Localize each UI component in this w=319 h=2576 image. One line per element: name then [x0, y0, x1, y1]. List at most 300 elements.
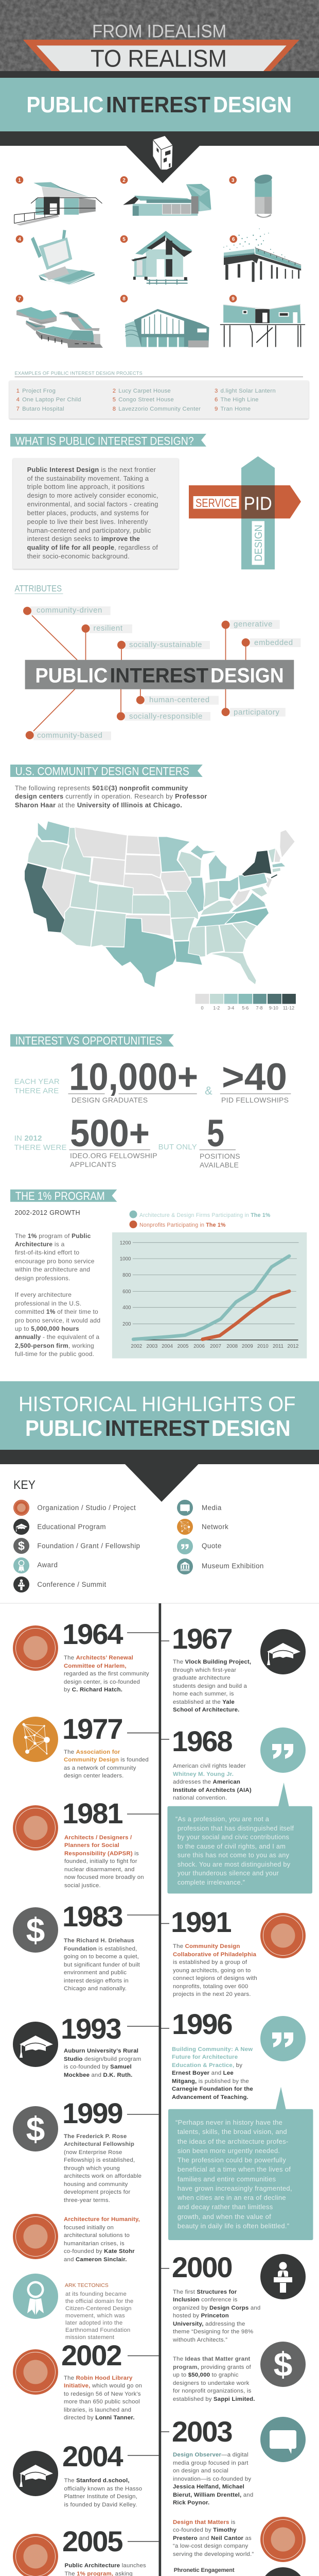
year 2000: 2000	[172, 2251, 232, 2283]
banner: historical highlights: PUBLIC	[25, 1416, 102, 1441]
map legend: 0	[201, 1006, 204, 1011]
entry 2002: directed by Lonni Tanner.	[64, 2415, 135, 2421]
1% program text: annually - the equivalent of a	[15, 1333, 99, 1341]
icon: educational program	[13, 2451, 58, 2496]
entry 2004: Plattner Institute of Design,	[64, 2494, 137, 2500]
illustration: d.light Solar Lantern	[254, 173, 273, 218]
entry Ark Tectonics body: at its founding became	[65, 2291, 127, 2297]
stat label: in 2012	[14, 1134, 67, 1152]
entry 2002: Initiative, which would go on	[64, 2383, 142, 2389]
definition text: of the sustainability movement. Taking a	[27, 474, 149, 482]
heading: examples of projects: EXAMPLES OF PUBLIC INTEREST DESIGN PROJECTS	[14, 370, 143, 376]
attribute diagram connectors	[23, 607, 250, 739]
key label: Educational Program	[37, 1523, 106, 1531]
map legend	[196, 994, 296, 1011]
entry 1999: Architectural Fellowship	[64, 2141, 134, 2147]
icon: award	[13, 2274, 58, 2319]
entry Design that Matters: serving the developing world.”	[173, 2551, 254, 2557]
entry 1999: housing and community	[64, 2181, 128, 2188]
entry 1968: national convention.	[173, 1795, 227, 1801]
line chart: 1% program growth: 1200	[120, 1240, 131, 1246]
entry 2003: Bierut, William Drenttel, and	[173, 2492, 253, 2498]
diagram: service and design cross	[189, 456, 301, 569]
icon: organization	[13, 2534, 58, 2576]
header banner: DESIGN	[213, 93, 292, 117]
1% program text: design professions.	[15, 1275, 70, 1282]
entry Ideas that Matter: established by Sappi Limited.	[173, 2396, 255, 2402]
year 1996: 1996	[172, 2008, 232, 2040]
entry 2002	[64, 2375, 142, 2422]
entry 1977: The Association for	[64, 1749, 120, 1755]
1% program text: professional in the U.S.	[15, 1300, 81, 1307]
icon: foundation	[13, 2106, 58, 2151]
project badges	[16, 176, 237, 302]
project badges: 1	[18, 178, 21, 183]
attributes central bar	[25, 660, 294, 689]
quote text: Building Community: growth, and when the value of	[178, 2213, 271, 2221]
banner: historical highlights: DESIGN	[211, 1416, 291, 1441]
year 2003: 2003	[172, 2415, 232, 2448]
entry Ideas that Matter: for nonprofit organizations, is	[173, 2388, 251, 2394]
1% program text: The 1% program of Public	[15, 1232, 91, 1240]
attribute label: generative	[234, 620, 273, 629]
attributes central bar: DESIGN	[210, 665, 284, 687]
key label: Foundation / Grant / Fellowship	[37, 1541, 140, 1550]
entry 1996: Ernest Boyer and Lee	[172, 2070, 234, 2076]
entry 1977	[64, 1749, 149, 1779]
entry 1991: is established by a group of	[173, 1959, 247, 1965]
1% program text: If every architecture	[15, 1291, 72, 1298]
entry Architecture for Humanity: Architecture for Humanity,	[64, 2216, 140, 2223]
entry 2002: The Robin Hood Library	[64, 2375, 133, 2381]
diagram: service and design cross: SERVICE	[196, 496, 237, 510]
entry Architecture for Humanity: focused initially on	[64, 2225, 114, 2231]
1% program text: within the architecture and	[15, 1266, 90, 1273]
entry 2003: Jessica Helfand, Michael	[173, 2484, 244, 2490]
project list text column 2	[113, 388, 201, 412]
key label: Quote	[202, 1542, 222, 1550]
line chart: 1% program growth	[112, 1232, 307, 1359]
entry 1996: Future for Architecture	[172, 2054, 238, 2060]
year 1981: 1981	[62, 1797, 122, 1829]
project list text column 3: 3	[215, 388, 218, 394]
project badges: 5	[122, 237, 126, 243]
attribute label: community-based	[37, 731, 102, 740]
project badges: 3	[232, 178, 235, 183]
entry 1967: home each summer, is	[173, 1691, 234, 1697]
definition text: Public Interest Design is the next frontier	[27, 466, 156, 473]
map intro text: Sharon Haar at the University of Illinois at Chicago.	[15, 801, 182, 809]
illustration: Lucy Carpet House	[123, 184, 211, 216]
entry 1964	[64, 1655, 149, 1693]
illustration: One Laptop Per Child	[31, 230, 95, 285]
quote text: Building Community: “Perhaps never in history have the	[175, 2119, 282, 2126]
stat label: each year: EACH YEAR	[14, 1077, 60, 1086]
entry Ideas that Matter: program, providing grants of	[173, 2364, 251, 2370]
map legend: 11-12	[283, 1006, 294, 1011]
entry 1996: Education & Practice, by	[172, 2062, 242, 2069]
entry 1983: going on to become a quiet,	[64, 1954, 139, 1960]
stat caption: fellowships: PID FELLOWSHIPS	[221, 1096, 289, 1104]
entry Phronetic Engagement title: Phronetic Engagement	[174, 2567, 235, 2573]
key: organization	[13, 1500, 29, 1516]
line chart: 1% program growth: 2010	[257, 1344, 269, 1349]
banner: historical highlights	[0, 1381, 319, 1502]
header textured band	[0, 0, 319, 72]
stat: positions available	[200, 1112, 236, 1155]
year 1999: 1999	[62, 2097, 122, 2129]
1% program text	[14, 1232, 100, 1358]
definition text: environmental, and social factors - creating	[27, 500, 158, 508]
project list text column 2: 2	[113, 388, 116, 394]
quote text: Young: your thunderous silence and your	[178, 1870, 279, 1877]
entry 1983: interest design efforts in	[64, 1977, 129, 1984]
project list text: Project Frog	[22, 388, 56, 394]
icon: organization	[13, 2349, 58, 2395]
icon: organization	[13, 1625, 58, 1671]
key label: Award	[37, 1561, 58, 1569]
entry 1977: as a network of community	[64, 1765, 136, 1771]
key label: Organization / Studio / Project	[37, 1504, 136, 1512]
title frame	[23, 40, 299, 71]
stat label: each year	[14, 1077, 60, 1095]
quote text: Young: to the cause of civil rights, and I am	[178, 1843, 286, 1850]
project list text column 2: Lucy Carpet House	[118, 388, 171, 394]
entry 2000	[173, 2289, 260, 2344]
illustration: Butaro Hospital	[16, 307, 103, 348]
1% program text: first-of-its-kind effort to	[15, 1249, 79, 1256]
entry 1993: Mockbee and D.K. Ruth.	[64, 2072, 133, 2078]
entry Ideas that Matter: designers to undertake work	[173, 2380, 249, 2386]
stat: positions available: 5	[207, 1112, 224, 1155]
timeline spine and connectors	[127, 1603, 169, 2576]
entry 2000: The first Structures for	[173, 2289, 237, 2295]
entry 2003: on design and social	[173, 2468, 228, 2474]
entry 1991: connect legions of designs with	[173, 1975, 257, 1981]
project list text: 1	[16, 388, 20, 394]
project list text column 3: 9	[215, 406, 218, 412]
icon: building logo	[153, 136, 172, 170]
chart legend: Architecture & Design Firms Participating in The 1%	[139, 1212, 271, 1218]
definition text: design to more actively consider economic,	[27, 492, 158, 499]
entry 1983: Chicago and nationally.	[64, 1986, 127, 1992]
entry 2003: media group focused in part	[173, 2460, 249, 2466]
quote text: Young: complete irrelevance.”	[178, 1879, 245, 1886]
stat caption: positions	[200, 1152, 240, 1168]
entry 2002: to redesign 56 of New York’s	[64, 2391, 141, 2397]
entry Design that Matters: “a low-cost design company	[173, 2543, 248, 2549]
heading: attributes: ATTRIBUTES	[14, 583, 62, 594]
year 2004: 2004	[62, 2440, 122, 2472]
entry 2004: officially known as the Hasso	[64, 2485, 142, 2492]
icon: foundation: $	[26, 2110, 45, 2148]
entry 1991	[173, 1943, 257, 1997]
banner: interest vs opportunities: INTEREST VS OPPORTUNITIES	[15, 1035, 162, 1047]
title line two: TO REALISM	[91, 45, 227, 72]
project list text column 2: 8	[113, 406, 116, 412]
icon: media	[260, 2417, 306, 2462]
entry 1999: The Frederick P. Rose	[64, 2133, 127, 2139]
stat caption: design graduates: DESIGN GRADUATES	[72, 1096, 148, 1104]
1% program text: committed 1% of their time to	[15, 1308, 98, 1315]
definition text: quality of life for all people, regardless of	[27, 544, 158, 551]
entry 1981: Architects / Designers /	[64, 1834, 132, 1840]
line chart: 1% program growth: 600	[122, 1289, 131, 1295]
project list text column 3	[215, 388, 276, 412]
map legend: 5-6	[242, 1006, 249, 1011]
banner: what is PID: WHAT IS PUBLIC INTEREST DESIGN?	[15, 434, 194, 447]
definition text	[27, 466, 158, 560]
stat caption: applicants: IDEO.ORG FELLOWSHIP	[70, 1151, 157, 1159]
entry 2005: Public Architecture launches	[65, 2563, 146, 2569]
entry 1993	[64, 2048, 141, 2078]
entry 1981: social justice.	[64, 1883, 101, 1889]
line chart: 1% program growth: 2009	[242, 1344, 253, 1349]
project badges: 7	[18, 296, 21, 302]
entry 2000: organized by Design Corps and	[173, 2305, 260, 2311]
entry 2003: innovation—is co-founded by	[173, 2476, 251, 2482]
key: network	[177, 1519, 193, 1535]
entry 2000: Inclusion conference is	[173, 2297, 238, 2303]
key: quote	[177, 1538, 193, 1554]
entry 2000: hosted by Princeton	[173, 2313, 229, 2319]
entry 1996: Mitgang, is published by the	[172, 2078, 249, 2084]
1% program text: 2,500-person firm, working	[15, 1342, 94, 1349]
entry Ark Tectonics body: movement, which was	[65, 2313, 125, 2319]
stat caption: applicants	[70, 1151, 157, 1168]
entry 1967: students design and build a	[173, 1683, 247, 1689]
project list text column 3: 6	[215, 397, 218, 403]
stat label: in 2012: IN 2012	[14, 1134, 42, 1143]
1% program text: full-time for the public good.	[15, 1350, 94, 1358]
quote text: Building Community: The profession could be powerfully	[178, 2156, 286, 2164]
map of the U.S. by number of centers	[24, 821, 295, 988]
entry 2003	[173, 2451, 253, 2507]
entry 2005	[65, 2562, 146, 2576]
key: media	[177, 1500, 193, 1516]
entry 1999	[64, 2133, 141, 2205]
entry 1967	[173, 1659, 251, 1713]
entry 2002: libraries, is launched and	[64, 2407, 131, 2413]
key: conference	[13, 1577, 29, 1592]
header banner: INTEREST	[106, 93, 210, 117]
panel: project list background	[9, 381, 309, 419]
entry 1999: architects work on affordable	[64, 2173, 141, 2179]
entry Architecture for Humanity: architectural solutions to	[64, 2232, 130, 2239]
1% program text: up to 5,000,000 hours	[15, 1325, 79, 1332]
line chart: 1% program growth: 800	[122, 1273, 131, 1278]
entry 2004: is founded by David Kelley.	[64, 2502, 137, 2508]
entry 1996	[172, 2046, 253, 2100]
entry 1968: addresses the American	[173, 1779, 240, 1785]
entry Ideas that Matter: The Ideas that Matter grant	[173, 2356, 250, 2362]
line chart: 1% program growth: 200	[122, 1321, 131, 1327]
entry Architecture for Humanity: and Cameron Sinclair.	[64, 2257, 127, 2263]
entry 1981: Planners for Social	[64, 1842, 119, 1849]
quote text: Building Community: beneficial at a time when the lives of	[178, 2165, 291, 2173]
project list text: One Laptop Per Child	[22, 397, 81, 403]
map legend: 3-4	[227, 1006, 234, 1011]
line chart: 1% program growth: 2007	[210, 1344, 221, 1349]
quote text: Young: sure this has not come to you as any	[178, 1852, 289, 1859]
icon: organization	[260, 2516, 306, 2562]
project list text: Butaro Hospital	[22, 406, 64, 412]
attribute label: community-driven	[37, 606, 102, 615]
entry 1996: Carnegie Foundation for the	[172, 2086, 253, 2092]
stat: design graduates: 10,000+	[69, 1055, 198, 1098]
entry 1993: Auburn University’s Rural	[64, 2048, 138, 2054]
key label: Conference / Summit	[37, 1581, 107, 1588]
key: award	[13, 1557, 29, 1573]
line chart: 1% program growth: 2011	[273, 1344, 283, 1349]
1% program text: pro bono service, it would add	[15, 1317, 100, 1324]
entry Architecture for Humanity: co-founded by Kate Stohr	[64, 2248, 135, 2255]
entry 1968: American civil rights leader	[173, 1763, 246, 1769]
entry 1996: Advancement of Teaching.	[172, 2094, 249, 2100]
project badges: 2	[122, 178, 126, 183]
illustration: The High Line	[223, 228, 301, 282]
header banner: PUBLIC	[26, 93, 103, 117]
ampersand: &	[205, 1084, 212, 1097]
chart legend: Nonprofits Participating in The 1%	[139, 1222, 226, 1228]
entry 1999: Fellowship) is established,	[64, 2157, 135, 2163]
icon: educational program	[13, 2022, 58, 2067]
entry 1983: Foundation is established,	[64, 1945, 137, 1952]
entry 1999: development projects for	[64, 2189, 131, 2195]
year 1983: 1983	[62, 1900, 122, 1933]
quote text: Young: “As a profession, you are not a	[175, 1816, 269, 1823]
year 1967: 1967	[172, 1622, 232, 1655]
key: foundation	[13, 1538, 29, 1554]
banner: the 1% program: THE 1% PROGRAM	[15, 1190, 105, 1202]
definition text: interest design seeks to improve the	[27, 535, 140, 543]
definition text: human-centered and participatory, public	[27, 527, 151, 534]
entry 1999: through which young	[64, 2165, 120, 2171]
illustration: Congo Street House	[131, 231, 192, 284]
entry 1999: (now Enterprise Rose	[64, 2149, 122, 2156]
entry 2000: withouth Architects.”	[173, 2337, 227, 2343]
entry 1993: Studio design/build program	[64, 2056, 141, 2062]
line chart: 1% program growth: 2005	[178, 1344, 189, 1349]
entry 2002: more than 650 public school	[64, 2399, 140, 2405]
definition text: better places, products, and systems for	[27, 509, 149, 517]
project list text column 2: 5	[113, 397, 116, 403]
entry Ark Tectonics: ARK TECTONICS	[65, 2282, 109, 2289]
icon: foundation	[260, 2342, 306, 2387]
quote box: Whitney Young	[167, 1783, 312, 1893]
entry 2003: Rick Poynor.	[173, 2500, 209, 2506]
year 1991: 1991	[171, 1906, 231, 1938]
icon: educational program	[260, 1629, 306, 1674]
entry 1991: The Community Design	[173, 1943, 240, 1950]
entry Ark Tectonics body: Earthnomad Foundation	[65, 2327, 130, 2333]
project list text column 3: The High Line	[220, 397, 259, 403]
quote text: Building Community: sion been more urgently needed.	[178, 2147, 280, 2155]
title line one: FROM IDEALISM	[92, 21, 226, 41]
subheading: growth: 2002-2012 GROWTH	[14, 1209, 80, 1216]
icon: quote	[260, 2016, 306, 2061]
entry 1991: projects in the next 20 years.	[173, 1991, 251, 1997]
entry 1977: design center leaders.	[64, 1773, 123, 1779]
project badges: 4	[18, 237, 21, 243]
icon: foundation: $	[274, 2345, 292, 2383]
quote text: Building Community: families and entire communities	[178, 2175, 276, 2183]
map legend: 1-2	[213, 1006, 220, 1011]
map intro text: The following represents 501©(3) nonprofit community	[15, 784, 188, 792]
panel: definition background	[13, 458, 179, 569]
definition text: people to live their best lives. Inherently	[27, 518, 148, 526]
key label: Museum Exhibition	[202, 1562, 264, 1570]
project list text: 4	[16, 397, 20, 403]
project list text: 7	[16, 406, 20, 412]
entry 1967: through which first-year	[173, 1667, 236, 1673]
entry Ark Tectonics body: later adopted into the	[65, 2320, 122, 2326]
entry 1964: design center, is co-founded	[64, 1679, 140, 1685]
entry 1991: nonprofits, totaling over 600	[173, 1984, 248, 1990]
stat caption: positions: AVAILABLE	[200, 1160, 239, 1168]
key: museum exhibition	[177, 1558, 193, 1574]
project list text column 2: Lavezzorio Community Center	[118, 406, 201, 412]
illustration: Tran Home	[220, 304, 305, 347]
diagram: service and design cross: PID	[244, 493, 272, 514]
key: educational program	[13, 1519, 29, 1535]
quote text: Building Community: and decay rather than limitless	[178, 2203, 273, 2211]
entry Ark Tectonics body: mission statement	[65, 2334, 114, 2341]
icon: educational program	[260, 2567, 306, 2576]
entry Ark Tectonics body	[65, 2291, 133, 2341]
banner: historical highlights: HISTORICAL HIGHLIGHTS OF	[19, 1392, 295, 1416]
stat caption: applicants: APPLICANTS	[70, 1160, 116, 1168]
stat label: in 2012: THERE WERE	[14, 1143, 67, 1152]
project badges: 6	[232, 237, 235, 243]
entry 1981: now focused more broadly on	[64, 1874, 144, 1880]
line chart: 1% program growth: 2003	[147, 1344, 158, 1349]
icon: network	[13, 1717, 58, 1762]
stat: fellowship applicants: 500+	[70, 1112, 150, 1155]
attribute label: socially-sustainable	[129, 640, 202, 649]
stat: PID fellowships: >40	[222, 1055, 287, 1098]
attribute label: human-centered	[149, 696, 210, 704]
entry 1968: Whitney M. Young Jr.	[173, 1771, 234, 1777]
icon: foundation	[13, 1907, 58, 1953]
key: foundation: $	[18, 1539, 25, 1553]
entry 1993: is co-founded by Samuel	[64, 2064, 132, 2070]
line chart: 1% program growth: 2004	[162, 1344, 173, 1349]
entry 1964: by C. Richard Hatch.	[64, 1687, 122, 1693]
entry Design that Matters: Prestero and Neil Cantor as	[173, 2535, 252, 2541]
year 2002: 2002	[61, 2339, 121, 2371]
icon: organization	[13, 2214, 58, 2259]
year 1993: 1993	[61, 2012, 121, 2045]
quote text: Building Community: the ideas of the architecture profes-	[178, 2138, 289, 2145]
entry 1967: graduate architecture	[173, 1675, 231, 1681]
quote text: Building Community: beauty in daily life is often belittled.”	[178, 2222, 289, 2230]
entry Ark Tectonics body: the official domain for the	[65, 2298, 133, 2304]
line chart: 1% program growth: 1000	[120, 1256, 131, 1262]
attributes central bar: INTEREST	[110, 665, 208, 687]
project list text	[16, 388, 81, 412]
map intro text: design centers currently in operation. Research by Professor	[15, 792, 207, 800]
entry 1967: established at the Yale	[173, 1699, 235, 1705]
icon: quote	[260, 1727, 306, 1773]
key label: Media	[202, 1504, 222, 1512]
quote text: Building Community: talents, skills, the broad vision, and	[178, 2128, 287, 2136]
illustration: Lavezzorio Community Center	[125, 309, 209, 347]
entry 1996: Building Community: A New	[172, 2046, 253, 2053]
line chart: 1% program growth: 2012	[288, 1344, 298, 1349]
entry 1964: Committee of Harlem,	[64, 1663, 127, 1669]
entry Design that Matters	[173, 2519, 254, 2558]
